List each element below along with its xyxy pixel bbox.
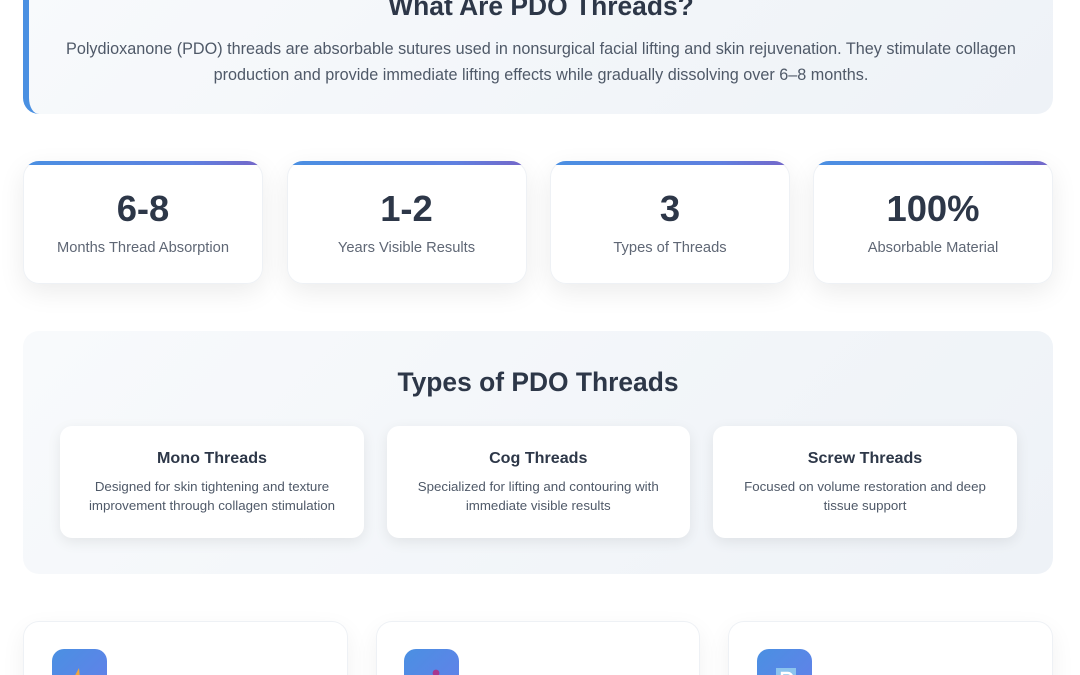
feature card: left (23, 621, 348, 675)
card description: Specialized for lifting and contouring with (418, 479, 659, 494)
stat card: 1-2 years (286, 161, 526, 284)
stat card: 6-8 months (23, 161, 263, 284)
card title: Mono Threads (157, 448, 267, 466)
card title: Screw Threads (808, 448, 922, 466)
card description (744, 479, 986, 513)
stat label: Months Thread Absorption (57, 240, 229, 256)
card description: improvement through collagen stimulation (89, 498, 335, 513)
text block: intro description: Polydioxanone (PDO) threads are absorbable sutures used in nonsurgical facial lifting and skin rejuvenation. They stimulate collagen (66, 40, 1016, 58)
card: cog threads (386, 426, 690, 538)
card description (89, 479, 335, 513)
stat label: Years Visible Results (338, 240, 475, 256)
card description: Focused on volume restoration and deep (744, 479, 986, 494)
card title: Cog Threads (489, 448, 587, 466)
card description: immediate visible results (466, 498, 611, 513)
stat number: 1-2 (380, 188, 433, 229)
stat number: 100% (886, 188, 980, 229)
stat label: Absorbable Material (868, 240, 998, 256)
heading: types of PDO threads: Types of PDO Threads (397, 367, 679, 397)
card description (418, 479, 659, 513)
panel: types of PDO threads (23, 331, 1053, 574)
stat label: Types of Threads (613, 240, 727, 256)
feature card: right (728, 621, 1053, 675)
stat card: 100% absorbable (813, 161, 1053, 284)
text block: intro description: production and provide immediate lifting effects while gradually dissolving over 6–8 months. (214, 66, 868, 84)
stat card: 3 types (550, 161, 790, 284)
stat number: 3 (660, 188, 680, 229)
text block: intro description (66, 40, 1016, 84)
stat number: 6-8 (117, 188, 169, 229)
feature card: middle (376, 621, 700, 675)
card: mono threads (60, 426, 364, 538)
icon: lightning bolt (52, 649, 107, 675)
card description: tissue support (824, 498, 906, 513)
card description: Designed for skin tightening and texture (95, 479, 329, 494)
card: screw threads (713, 426, 1017, 538)
panel: intro (23, 0, 1053, 114)
icon: document (757, 649, 812, 675)
icon: test tube (404, 649, 459, 675)
